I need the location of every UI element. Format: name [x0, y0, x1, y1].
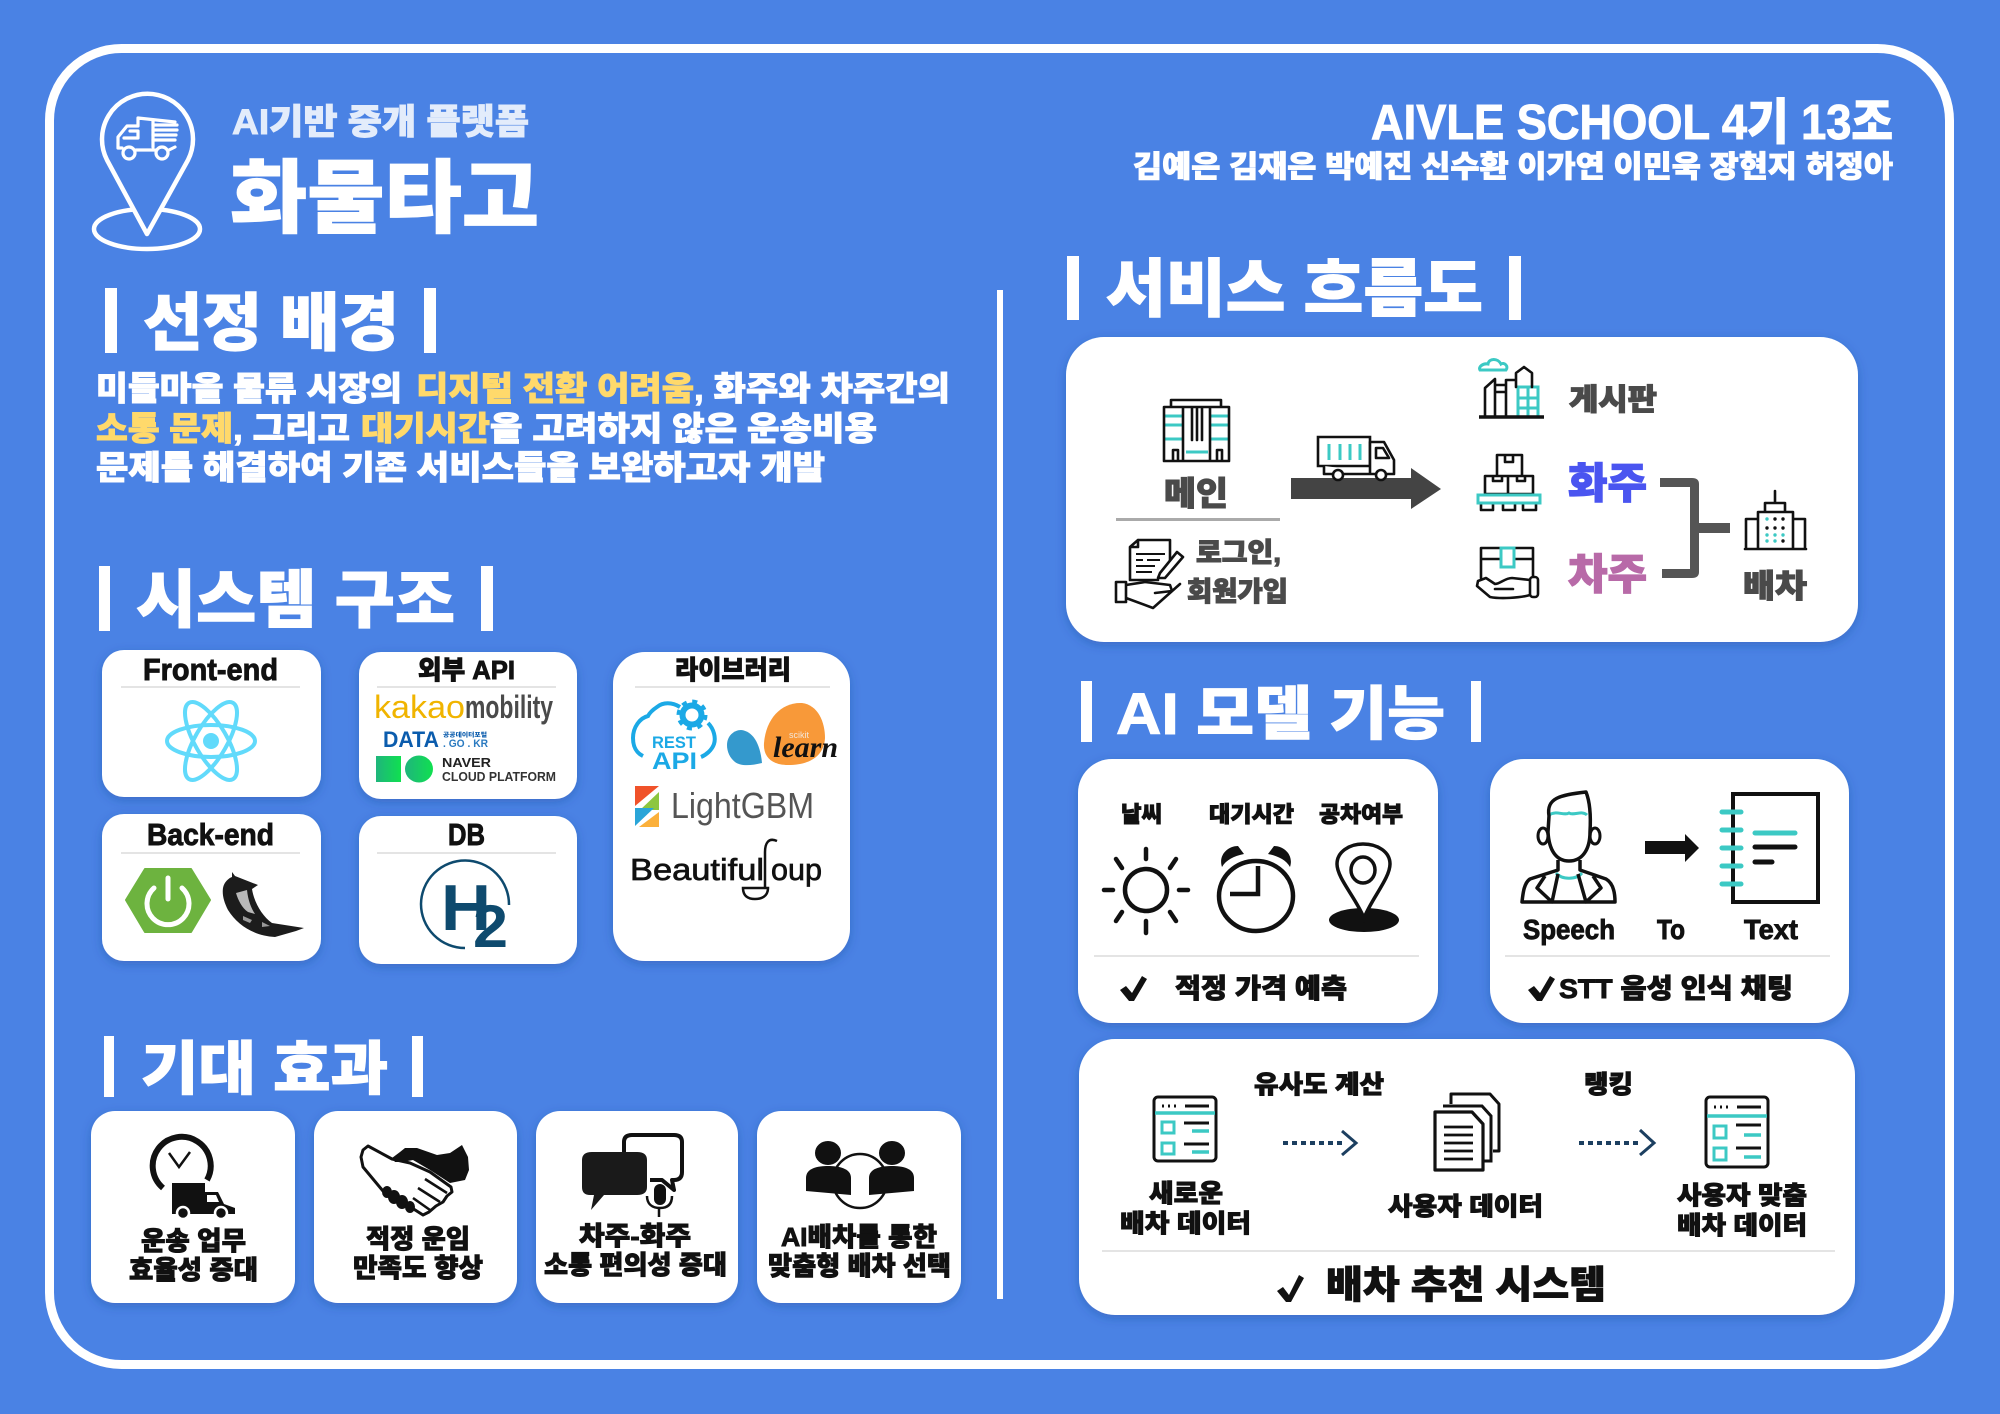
- label: ranking: 랭킹: [1584, 1071, 1633, 1099]
- icon: alarm clock: [1219, 846, 1293, 931]
- icon: sun: [1104, 849, 1188, 933]
- section: background: [96, 288, 950, 486]
- label: to: To: [1657, 914, 1685, 945]
- check mark: [1277, 1275, 1304, 1302]
- logo: naver cloud: NAVER: [442, 755, 492, 770]
- icon: city: [1479, 360, 1544, 417]
- logo: kakao mobility: [374, 689, 553, 725]
- header: logo and title: [94, 94, 539, 249]
- panel: recommendation system: [1079, 1039, 1855, 1315]
- logo: Beautiful Soup: Beautiful: [630, 852, 764, 887]
- label: dispatch: 배차: [1743, 568, 1807, 604]
- icon: delivery truck: [1318, 437, 1394, 480]
- check mark: [1120, 976, 1147, 1001]
- heading: 선정 배경: 선정 배경: [143, 289, 399, 359]
- label: personalized dispatch data: 사용자 맞춤: [1677, 1182, 1807, 1210]
- logo: data.go.kr: [383, 727, 488, 752]
- section: expected effects: [91, 1036, 961, 1303]
- arrow: main to users: [1291, 468, 1441, 509]
- heading: 시스템 구조: 시스템 구조: [136, 566, 455, 636]
- card: DB: [359, 816, 577, 964]
- logo: Beautiful Soup: [630, 840, 822, 899]
- icon: boxes on pallet: [1478, 455, 1540, 510]
- icon: handshake: [361, 1145, 469, 1215]
- label: similarity: 유사도 계산: [1254, 1071, 1384, 1099]
- label: main: 메인: [1164, 475, 1228, 512]
- caption: recommendation system: 배차 추천 시스템: [1326, 1265, 1606, 1307]
- label: text: Text: [1744, 914, 1798, 945]
- icon: document and hand: [1116, 540, 1183, 608]
- card: libraries: 라이브러리: [675, 655, 791, 685]
- card: communication: [536, 1111, 738, 1303]
- logo: Beautiful Soup: oup: [771, 852, 822, 887]
- card: satisfaction: 만족도 향상: [353, 1253, 483, 1283]
- bracket connector: [1660, 478, 1730, 578]
- heading: 서비스 흐름도: 서비스 흐름도: [1106, 255, 1483, 325]
- card: DB: DB: [448, 817, 485, 852]
- logo: H2: 2: [473, 893, 508, 960]
- icon: chat bubbles and microphone: [582, 1135, 682, 1217]
- label: new dispatch data: 배차 데이터: [1120, 1210, 1251, 1238]
- logo: scikit-learn: learn: [773, 731, 838, 764]
- card: AI dispatch: [757, 1111, 961, 1303]
- logo: data.go.kr: DATA: [383, 727, 439, 752]
- background text: 디지털 전환 어려움: [416, 370, 694, 407]
- icon: person: [1522, 792, 1615, 902]
- card: libraries: [613, 652, 850, 961]
- logo: scikit-learn: scikit: [789, 730, 809, 740]
- caption: STT: STT 음성 인식 채팅: [1559, 974, 1793, 1004]
- title: 화물타고: [230, 154, 539, 243]
- card: back-end: [102, 814, 321, 961]
- label: new dispatch data: 새로운: [1149, 1180, 1223, 1208]
- card: back-end: Back-end: [147, 817, 274, 852]
- label: login: 로그인,: [1196, 538, 1281, 568]
- label: sign up: 회원가입: [1187, 577, 1288, 607]
- label: empty truck: 공차여부: [1319, 802, 1403, 827]
- vertical divider: [997, 290, 1003, 1299]
- section: system structure: [99, 566, 850, 964]
- header: team: [1133, 96, 1893, 184]
- card: efficiency: 운송 업무: [141, 1226, 246, 1256]
- check mark: [1528, 976, 1555, 1001]
- logo: kakao mobility: kakao: [374, 689, 465, 725]
- icon: two people: [806, 1141, 914, 1208]
- icon: flask horn: [223, 872, 304, 937]
- logo: REST API: API: [652, 748, 697, 775]
- arrow: speech to text: [1645, 834, 1699, 862]
- card: satisfaction: 적정 운임: [366, 1224, 470, 1254]
- label: shipper: 화주: [1568, 460, 1647, 507]
- logo: H2: H: [441, 871, 491, 944]
- background text: 문제를 해결하여 기존 서비스들을 보완하고자 개발: [96, 449, 825, 486]
- team name: AIVLE SCHOOL 4기 13조: [1371, 96, 1893, 150]
- logo: H2: [421, 860, 509, 960]
- label: personalized dispatch data: [1677, 1182, 1807, 1240]
- heading: AI 모델 기능: AI 모델 기능: [1116, 682, 1445, 747]
- logo: REST API: [633, 702, 715, 775]
- card: efficiency: 효율성 증대: [129, 1255, 258, 1285]
- label: speech: Speech: [1523, 914, 1615, 945]
- label: driver: 차주: [1568, 551, 1647, 598]
- icon: react: [167, 695, 255, 787]
- background text: , 그리고: [233, 410, 350, 447]
- icon: location pin with truck: [94, 94, 200, 249]
- arrow: dotted 1: [1283, 1131, 1356, 1155]
- panel: price prediction: [1078, 759, 1438, 1023]
- logo: kakao mobility: mobility: [465, 689, 553, 725]
- arrow: dotted 2: [1579, 1130, 1654, 1155]
- icon: hand holding box: [1477, 548, 1538, 598]
- members: 김예은 김재은 박예진 신수환 이가연 이민욱 장현지 허정아: [1133, 151, 1893, 184]
- logo: data.go.kr: 공공데이터포털: [443, 731, 488, 739]
- icon: notebook: [1722, 794, 1818, 902]
- logo: LightGBM: LightGBM: [671, 785, 814, 826]
- card: communication: 차주-화주: [579, 1221, 691, 1251]
- background text: , 화주와 차주간의: [694, 370, 950, 407]
- background text: 대기시간: [361, 410, 490, 447]
- label: waiting time: 대기시간: [1209, 802, 1294, 827]
- label: new dispatch data: [1120, 1180, 1251, 1238]
- icon: main building: [1164, 400, 1229, 461]
- logo: data.go.kr: . GO . KR: [443, 738, 488, 750]
- icon: location pin: [1329, 844, 1399, 932]
- card: AI dispatch: AI배차를 통한: [781, 1222, 937, 1252]
- card: external API: 외부 API: [418, 655, 515, 685]
- logo: naver cloud: [376, 755, 556, 784]
- card: external API: [359, 652, 577, 799]
- card: front-end: Front-end: [143, 652, 278, 687]
- icon: spring: [126, 869, 210, 932]
- card: front-end: [102, 650, 321, 797]
- label: user data: 사용자 데이터: [1388, 1193, 1543, 1221]
- card: AI dispatch: 맞춤형 배차 선택: [768, 1251, 951, 1281]
- icon: form 2: [1706, 1097, 1768, 1167]
- card: communication: 소통 편의성 증대: [544, 1250, 727, 1280]
- heading: 기대 효과: 기대 효과: [141, 1037, 388, 1102]
- label: board: 게시판: [1569, 384, 1657, 417]
- icon: form 1: [1154, 1097, 1216, 1161]
- card: satisfaction: [314, 1111, 517, 1303]
- logo: naver cloud: CLOUD PLATFORM: [442, 769, 556, 784]
- logo: scikit-learn: [727, 703, 838, 765]
- icon: dispatch building: [1745, 491, 1806, 549]
- background text: 을 고려하지 않은 운송비용: [490, 410, 877, 447]
- subtitle: AI기반 중개 플랫폼: [232, 103, 529, 142]
- background text: 소통 문제: [96, 410, 233, 447]
- label: personalized dispatch data: 배차 데이터: [1677, 1212, 1807, 1240]
- caption: price prediction: 적정 가격 예측: [1175, 974, 1347, 1004]
- background text: 미들마을 물류 시장의: [96, 370, 402, 407]
- card: efficiency: [91, 1111, 295, 1303]
- section: service flow: [1066, 255, 1858, 642]
- logo: REST API: REST: [652, 733, 697, 752]
- icon: documents: [1435, 1094, 1499, 1170]
- icon: clock and truck: [153, 1137, 235, 1219]
- background text: [96, 370, 950, 486]
- panel: speech to text: [1490, 759, 1849, 1023]
- panel: flow diagram: [1066, 337, 1858, 642]
- label: weather: 날씨: [1121, 802, 1162, 827]
- section: AI models: [1078, 681, 1855, 1315]
